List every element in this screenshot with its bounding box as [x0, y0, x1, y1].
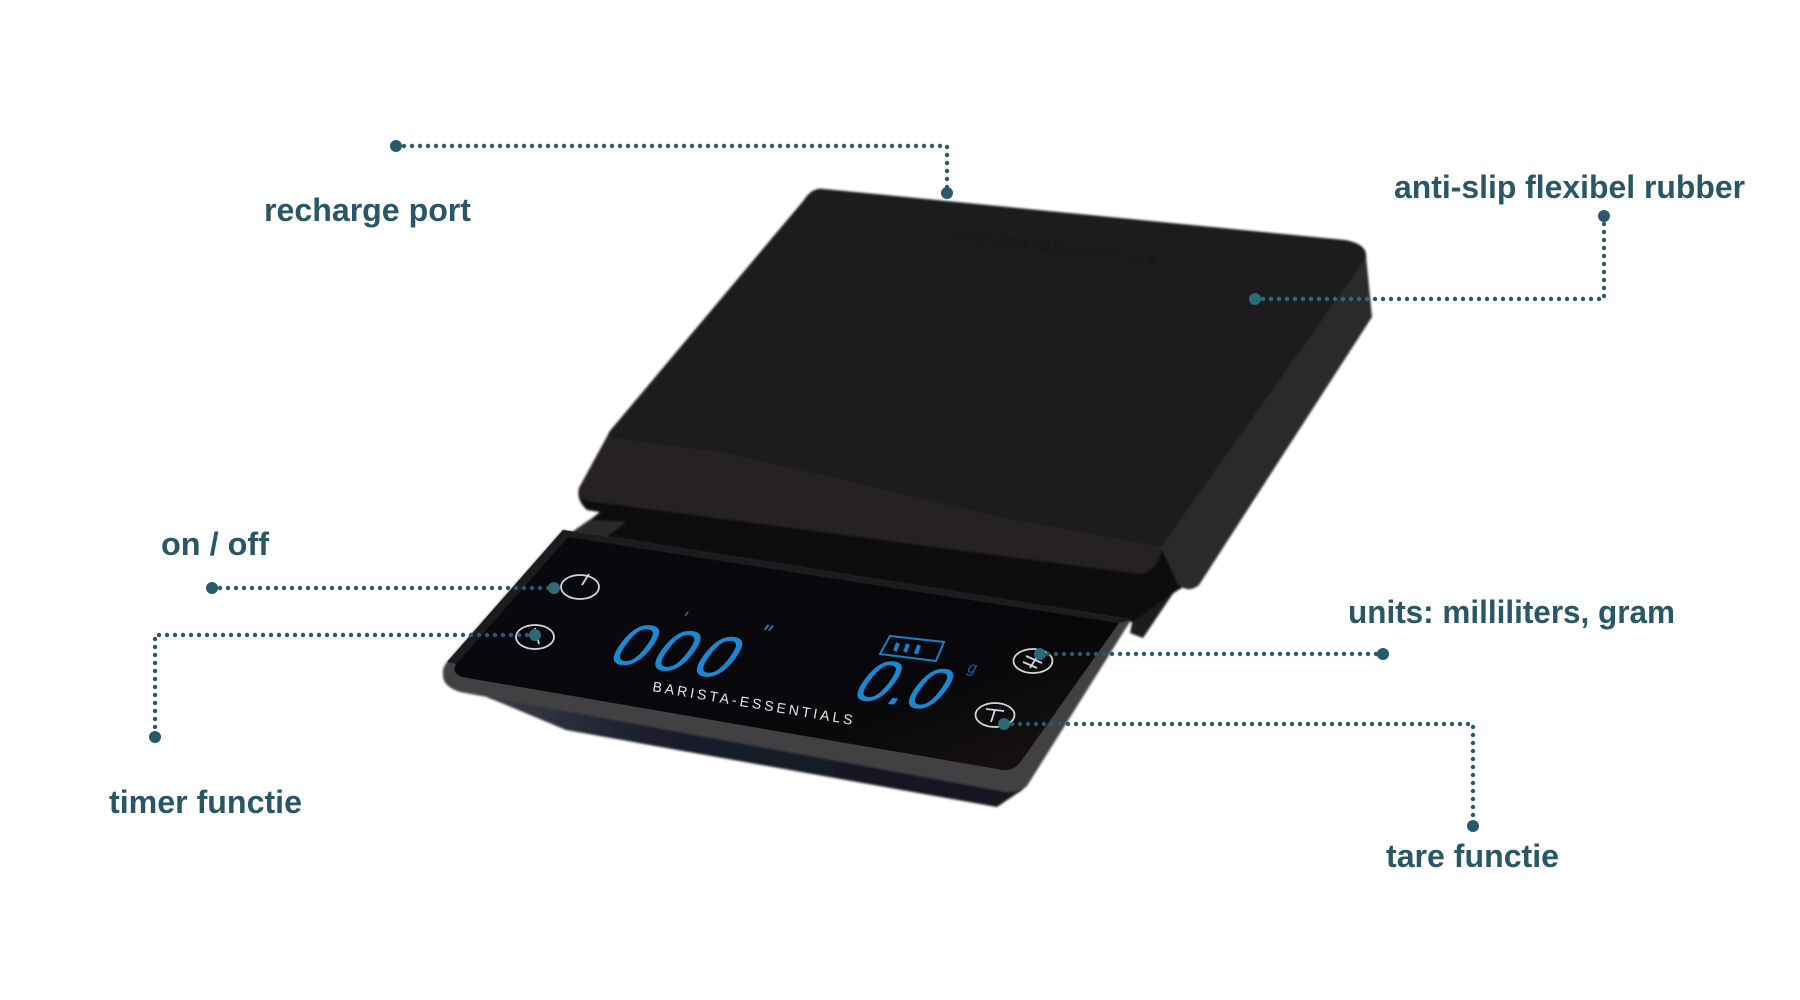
callout: on / off: on / off — [161, 526, 269, 562]
LCD timer reading: 000 — [595, 612, 766, 692]
callout: tare functie — [998, 718, 1559, 874]
glass display — [454, 537, 1119, 770]
callout: tare functie: tare functie — [1386, 838, 1559, 874]
button: power — [561, 574, 599, 599]
LCD battery indicator — [880, 636, 944, 661]
button: timer — [516, 625, 554, 649]
display bezel — [443, 530, 1131, 792]
button: units — [1014, 649, 1052, 673]
callout: on / off — [161, 526, 560, 594]
LCD timer reading: " — [750, 619, 779, 648]
embossed brand on plate: BARISTA-ESSENTIALS — [950, 228, 1161, 267]
callout: recharge port — [264, 140, 953, 228]
callout: units — [1034, 594, 1675, 660]
callout: recharge port: recharge port — [264, 192, 471, 228]
callout: anti-slip rubber: anti-slip flexibel rubber — [1394, 169, 1745, 205]
callout: anti-slip rubber — [1249, 169, 1745, 305]
callout: units: units: milliliters, gram — [1348, 594, 1675, 630]
brand name: BARISTA-ESSENTIALS — [651, 678, 857, 728]
bezel top and left shading — [447, 530, 1131, 664]
LCD weight reading: g — [964, 660, 980, 677]
callout: timer functie: timer functie — [109, 784, 302, 820]
button: tare — [976, 703, 1014, 727]
callout: timer functie — [109, 629, 541, 820]
LCD timer reading: ' — [674, 608, 692, 629]
scale body — [487, 189, 1372, 807]
LCD weight reading: 0.0 — [838, 648, 971, 723]
product: kitchen scale — [443, 189, 1372, 807]
